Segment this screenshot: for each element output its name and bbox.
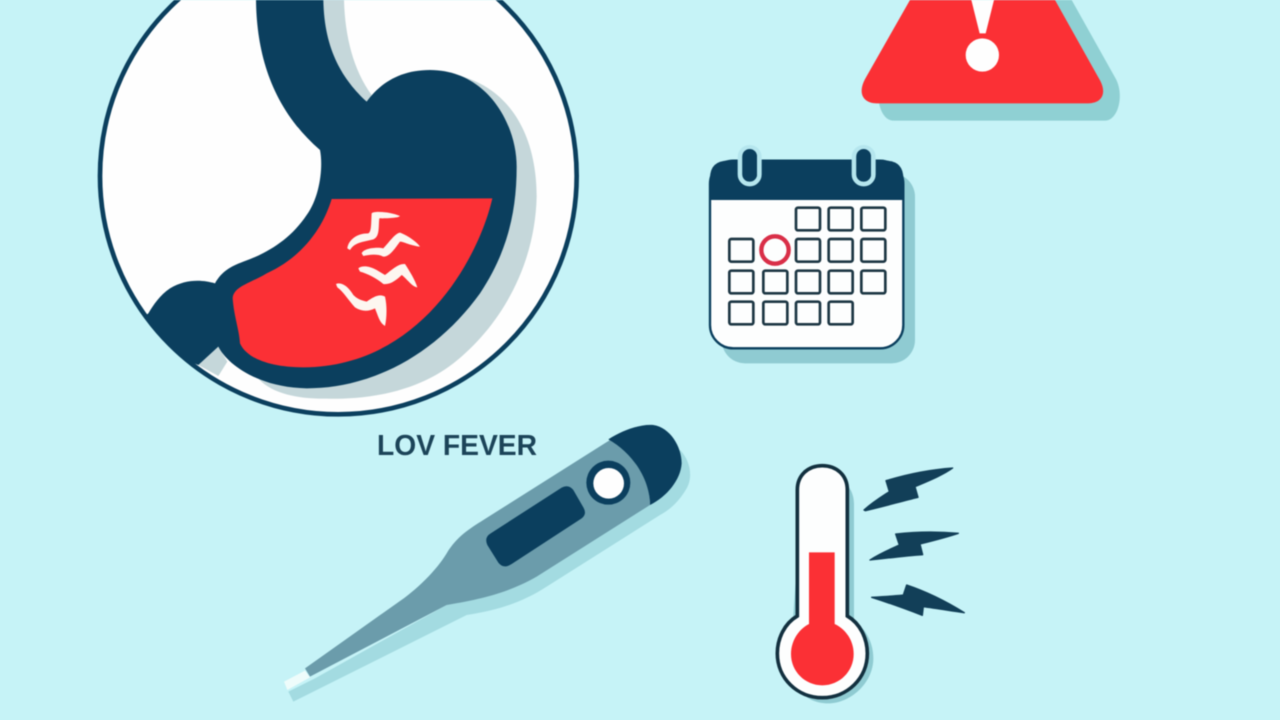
date grid: [729, 208, 885, 324]
stomach body: [123, 0, 517, 388]
thermometer body: [305, 440, 650, 677]
exclamation mark: [966, 0, 999, 72]
infographic canvas: [96, 0, 1120, 704]
binder rings: [740, 147, 873, 184]
icon: digital thermometer: [284, 425, 690, 702]
calendar header: [710, 161, 903, 200]
panel: stomach in circle: [100, 0, 577, 414]
pain squiggles: [336, 212, 420, 326]
mercury thermometer glass: [777, 466, 867, 698]
calendar page: [710, 161, 903, 348]
heat bolts: [864, 468, 964, 615]
calendar shadow: [722, 173, 915, 363]
display: [486, 486, 585, 566]
white tip: [284, 671, 310, 690]
triangle body: [862, 0, 1103, 103]
label: low fever: LOV FEVER: [377, 430, 537, 462]
thermometer cap: [608, 425, 682, 505]
icon: warning triangle: [862, 0, 1120, 121]
icon: calendar: [710, 147, 915, 363]
ring tops: [742, 149, 871, 182]
icon: mercury thermometer: [777, 466, 964, 703]
red inflamed area: [233, 198, 492, 367]
button: [586, 461, 630, 505]
stomach shadow: [198, 0, 537, 399]
triangle shadow: [878, 0, 1120, 121]
thermometer shadow: [288, 450, 690, 702]
circle outline: [100, 0, 577, 414]
circled date: [761, 236, 789, 264]
mercury: [791, 552, 854, 685]
mercury thermometer shadow: [790, 469, 873, 703]
